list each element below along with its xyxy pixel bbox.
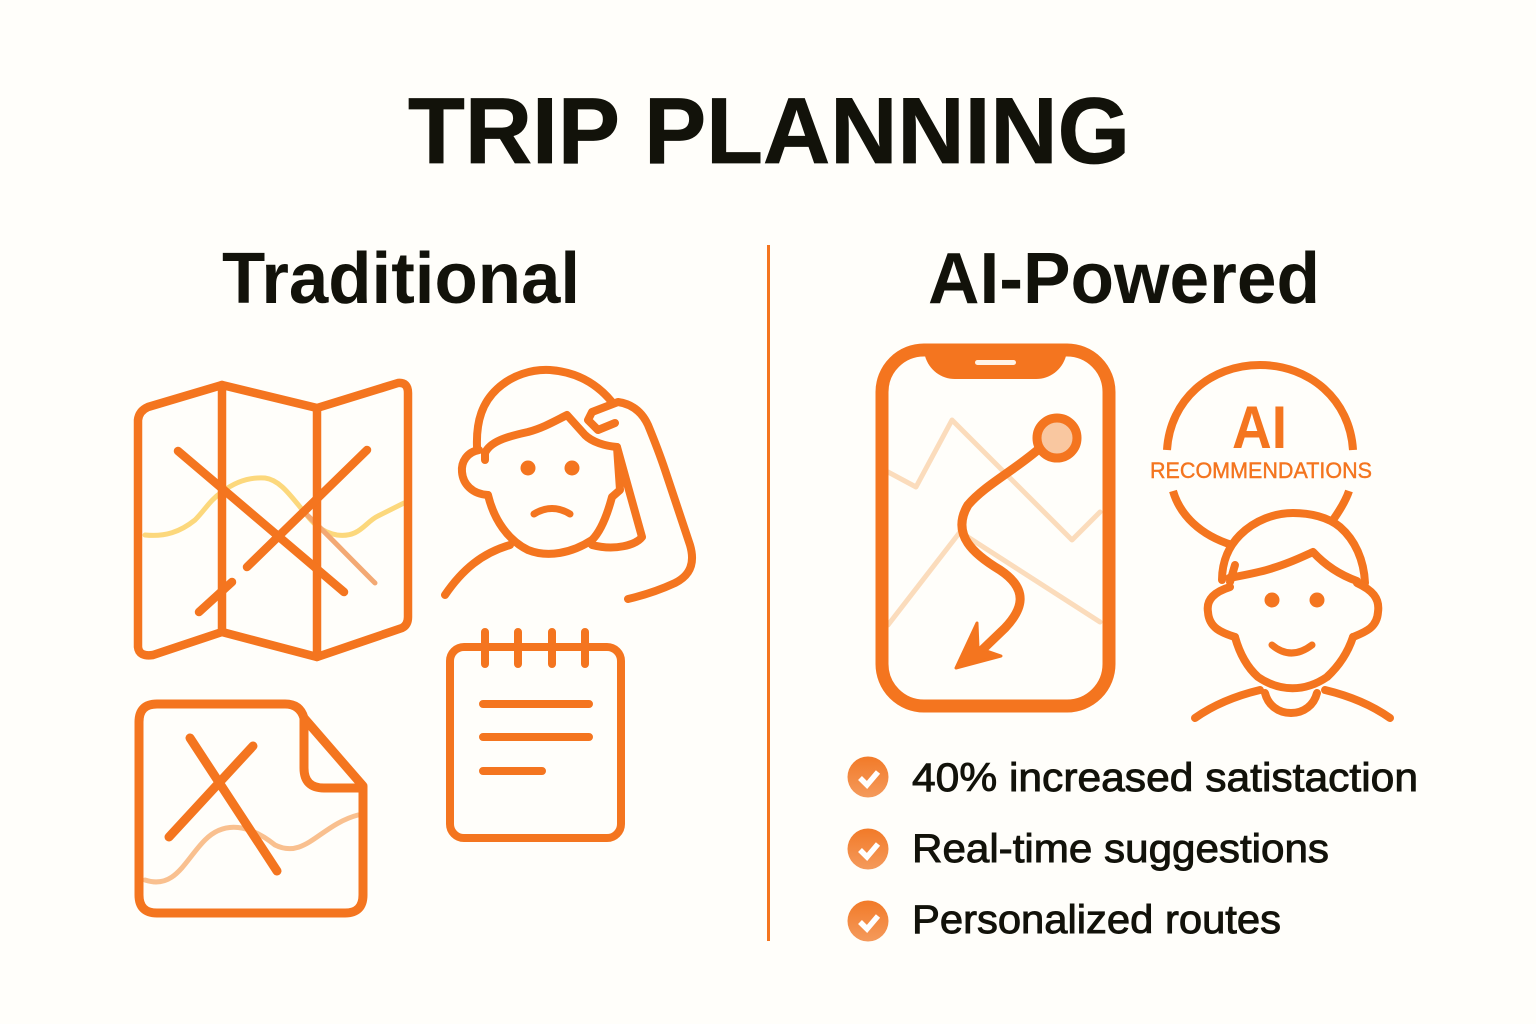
phone body (882, 350, 1109, 706)
center divider (767, 245, 770, 941)
phone map background lines (888, 420, 1100, 625)
route arrow head (956, 623, 1001, 668)
icon: crossed-out paper map (139, 704, 363, 913)
heading: Traditional: Traditional (222, 239, 580, 319)
route pin (1037, 418, 1077, 458)
icon: smartphone with route (882, 350, 1109, 706)
icon: AI recommendations badge: AI (1232, 394, 1287, 461)
icon: AI recommendations badge (1150, 365, 1372, 545)
benefit: real-time suggestions: Real-time suggestions (912, 827, 1329, 871)
title: TRIP PLANNING (408, 78, 1130, 183)
phone notch (925, 356, 1066, 379)
icon: AI recommendations badge: RECOMMENDATIONS (1150, 458, 1372, 483)
icon: notepad (450, 632, 621, 838)
heading: AI-Powered: AI-Powered (928, 239, 1320, 319)
benefit: personalized routes: Personalized routes (912, 898, 1281, 942)
route (962, 448, 1040, 652)
icon: confused person scratching head (445, 370, 692, 599)
icon: crossed-out folded map (138, 383, 408, 657)
icon: happy person (1195, 513, 1390, 718)
benefit: 40% increased satisfaction: 40% increased satistaction (912, 756, 1418, 800)
